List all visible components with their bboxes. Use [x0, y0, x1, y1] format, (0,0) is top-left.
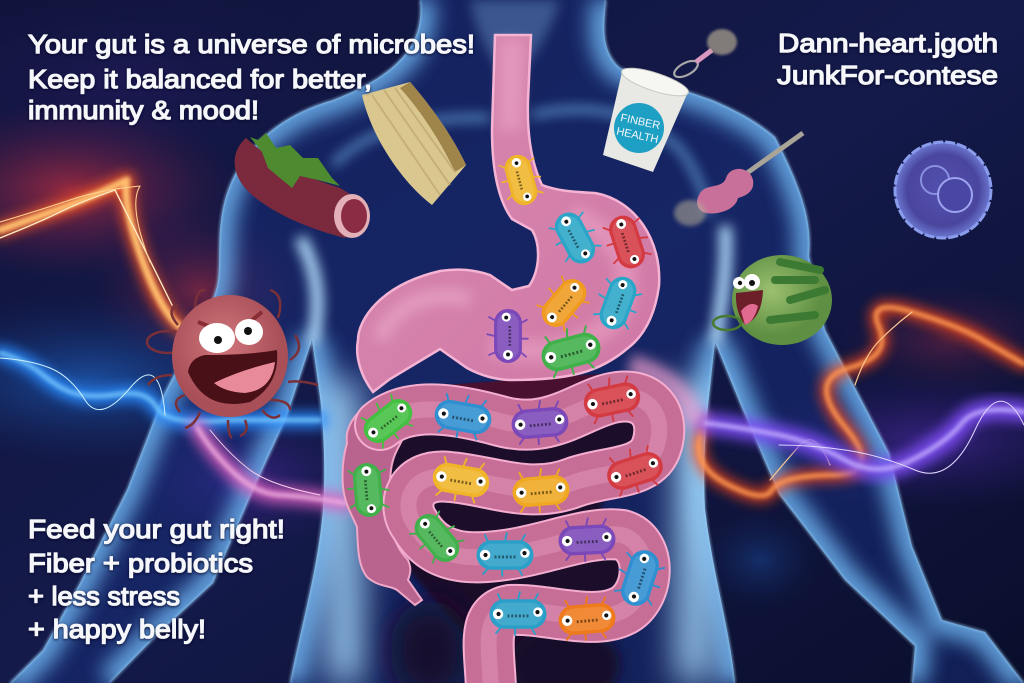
- icon: fiber health cup: HEALTH: [615, 126, 659, 146]
- icon: green microbe character: [713, 255, 832, 345]
- text: top right: Dann-heart.jgoth: [778, 28, 998, 58]
- energy lightning: left blue: [0, 353, 320, 422]
- title text: top left: immunity & mood!: [28, 95, 259, 125]
- icon: sausage meat with herb: [235, 133, 370, 238]
- ascending colon: [342, 403, 422, 605]
- energy lightning: right orange: [699, 307, 1024, 496]
- title text: top left: Keep it balanced for better,: [28, 64, 372, 94]
- text: top right: [777, 28, 998, 90]
- icon: wrapped food: [362, 82, 466, 205]
- intestines: [380, 396, 659, 683]
- text: bottom left: [28, 514, 285, 644]
- energy lightning: left orange: [0, 180, 185, 330]
- text: bottom left: Fiber + probiotics: [28, 548, 253, 578]
- icon: purple cell: [895, 142, 991, 238]
- pink wisp right of gut: [630, 365, 695, 425]
- title text: top left: Your gut is a universe of microbes!: [28, 29, 475, 59]
- icon: seed spoon: [672, 29, 737, 80]
- icon: pink dumbbell skewer: [674, 133, 803, 226]
- text: top right: JunkFor-contese: [777, 60, 998, 90]
- icon: angry red microbe: [147, 290, 318, 438]
- energy lightning: right purple: [705, 401, 1024, 473]
- text: bottom left: Feed your gut right!: [28, 514, 285, 544]
- energy lightning: pink bolt lower left: [197, 427, 345, 503]
- text: bottom left: + happy belly!: [28, 614, 206, 644]
- icon: fiber health cup: FINBER: [619, 112, 661, 132]
- title text: top left: [28, 29, 475, 125]
- icon: fiber health cup: [603, 63, 691, 172]
- esophagus and stomach: [357, 35, 659, 392]
- dark cavity behind the gut: [385, 372, 650, 683]
- gut bacteria: [346, 150, 669, 642]
- text: bottom left: + less stress: [28, 581, 180, 611]
